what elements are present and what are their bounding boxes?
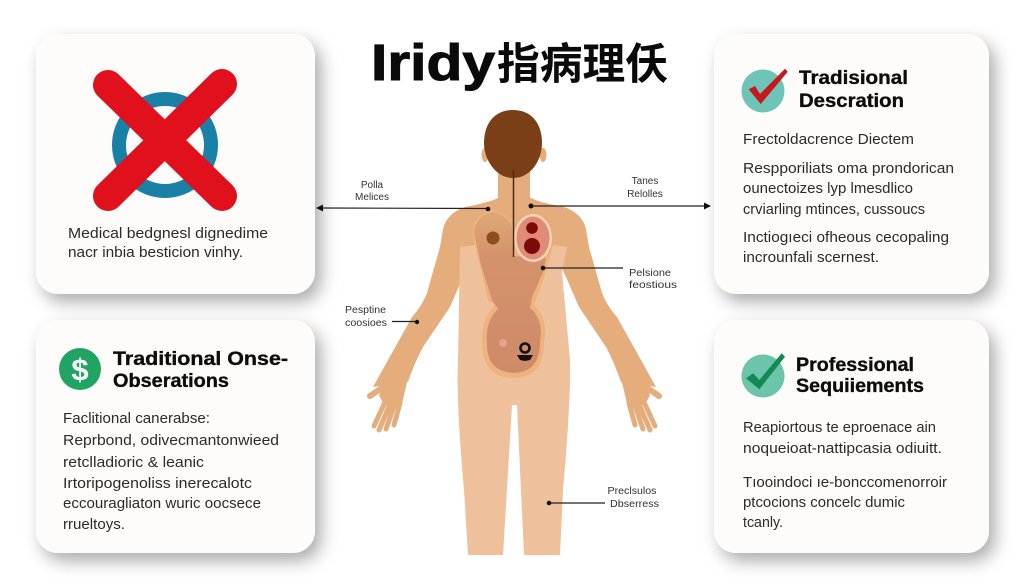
heart xyxy=(514,214,552,262)
title: Iridy xyxy=(371,34,496,91)
heading: traditional observations: Obserations xyxy=(113,371,229,392)
spine line xyxy=(512,170,514,257)
text: requirements body: ptcocions concelc dumic xyxy=(743,495,905,511)
text: requirements body: tcanly. xyxy=(743,515,783,531)
text: requirements body: Reapiortous te eproenace ain xyxy=(743,420,936,436)
panel: crossed circle card xyxy=(36,34,315,294)
panel: professional requirements card xyxy=(714,320,989,553)
text: card description xyxy=(68,226,268,261)
heading: traditional observations xyxy=(113,349,288,392)
text: observations body: retclladioric & leanic xyxy=(63,455,204,471)
callout: middle right: Pelsione xyxy=(629,268,671,279)
liver dot xyxy=(486,232,500,244)
organ outline xyxy=(472,210,552,378)
callout: upper right xyxy=(528,176,711,210)
heading: professional requirements xyxy=(796,355,924,397)
text: requirements body: noqueioat-nattipcasia odiuitt. xyxy=(743,441,942,457)
text: observations body xyxy=(63,411,279,533)
digestive organs xyxy=(474,212,546,373)
text: description body: Frectoldacrence Diectem xyxy=(743,132,914,148)
callout: upper left xyxy=(316,180,490,212)
heading: traditional description xyxy=(799,68,908,112)
callout: middle left: Pesptine xyxy=(345,305,386,316)
head hair xyxy=(484,110,542,178)
heart interior xyxy=(516,216,550,260)
callout: upper left: Polla xyxy=(361,180,384,191)
callout: lower right: Preclsulos xyxy=(608,486,656,497)
icon: green dollar xyxy=(59,348,101,390)
text: card description: nacr inbia besticion vinhy. xyxy=(68,245,243,261)
lower body and legs xyxy=(458,245,570,555)
text: description body: crviarling mtinces, cussoucs xyxy=(743,202,925,218)
text: description body: Respporiliats oma prondorican xyxy=(743,161,954,177)
heading: professional requirements: Sequiiements xyxy=(796,376,924,397)
heading: traditional description: Tradisional xyxy=(799,68,908,89)
title xyxy=(371,30,668,92)
left arm and upper torso xyxy=(370,196,500,430)
text: observations body: Faclitional canerabse: xyxy=(63,411,210,427)
callout: upper right: Relolles xyxy=(627,189,663,200)
text: description body: incrounfali scernest. xyxy=(743,250,879,266)
panel: traditional description card xyxy=(714,34,989,294)
text: requirements body: Tıooindoci ıe-bonccomenorroir xyxy=(743,475,947,491)
pink dot xyxy=(499,339,507,347)
neck and chest xyxy=(464,170,565,260)
heading: professional requirements: Professional xyxy=(796,355,914,376)
text: observations body: eccouragliaton wuric oocsece xyxy=(63,496,261,512)
text: description body: Inctiogıeci ofheous cecopaling xyxy=(743,230,949,246)
callout: middle left xyxy=(345,305,419,329)
text: observations body: rrueltoys. xyxy=(63,517,125,533)
icon: red cross over blue ring xyxy=(108,84,222,196)
panel: traditional observations card xyxy=(36,320,315,553)
text: description body xyxy=(743,132,954,266)
icon: green check on mint circle xyxy=(742,353,785,398)
icon: red check on teal circle xyxy=(742,69,788,112)
text: requirements body xyxy=(743,420,947,531)
icon: green dollar: $ xyxy=(71,352,89,387)
text: description body: ounectoizes lyp lmesdlico xyxy=(743,181,913,197)
callout: upper right: Tanes xyxy=(632,176,658,187)
heading: traditional observations: Traditional Onse- xyxy=(113,349,288,370)
black organ icon xyxy=(517,344,533,361)
callout: middle left: coosioes xyxy=(345,318,387,329)
text: observations body: Irtoripogenoliss inerecalotc xyxy=(63,476,252,492)
body figure xyxy=(370,110,659,555)
callout: middle right xyxy=(541,266,677,291)
heart chambers xyxy=(524,222,540,254)
right arm and upper torso xyxy=(529,196,659,430)
ears xyxy=(482,148,546,162)
title: 指病理仸 xyxy=(497,30,668,92)
callout: lower right xyxy=(547,486,659,510)
text: card description: Medical bedgnesl dignedime xyxy=(68,226,268,242)
callout: middle right: feostious xyxy=(629,280,677,291)
callout: lower right: Dbserress xyxy=(610,499,659,510)
heading: traditional description: Descration xyxy=(799,91,904,112)
text: observations body: Reprbond, odivecmantonwieed xyxy=(63,433,279,449)
callout: upper left: Melices xyxy=(355,192,389,203)
